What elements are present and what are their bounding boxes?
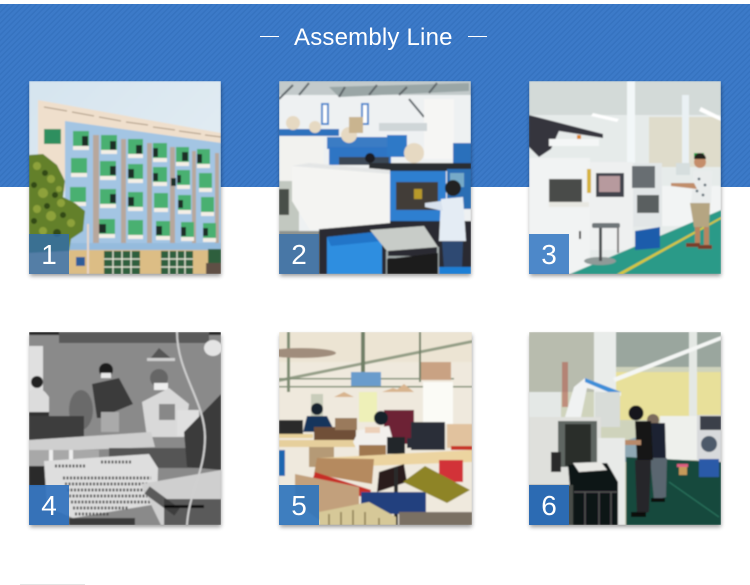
number badge 3: 3 bbox=[541, 239, 557, 270]
number badge 1 bbox=[29, 234, 69, 274]
faint line at page bottom bbox=[20, 584, 85, 585]
number badge 6 bbox=[529, 485, 569, 525]
number badge 4 bbox=[29, 485, 69, 525]
number badge 3 bbox=[529, 234, 569, 274]
photo card 6: inspection equipment bbox=[529, 332, 721, 527]
number badge 2: 2 bbox=[291, 239, 307, 270]
number badge 1: 1 bbox=[41, 239, 57, 270]
blue striped banner bbox=[0, 4, 750, 187]
number badge 4: 4 bbox=[41, 490, 57, 521]
number badge 2 bbox=[279, 234, 319, 274]
photo card 3: SMT production line bbox=[529, 81, 721, 276]
photo card 1: factory building bbox=[29, 81, 221, 276]
number badge 5: 5 bbox=[291, 490, 307, 521]
photo card 2: injection moulding machines bbox=[279, 81, 471, 276]
number badge 6: 6 bbox=[541, 490, 557, 521]
photo card 4: black and white packing line bbox=[29, 332, 222, 527]
photo card 5: packaging workshop bbox=[266, 332, 472, 527]
number badge 5 bbox=[279, 485, 319, 525]
title: Assembly Line bbox=[294, 24, 453, 51]
